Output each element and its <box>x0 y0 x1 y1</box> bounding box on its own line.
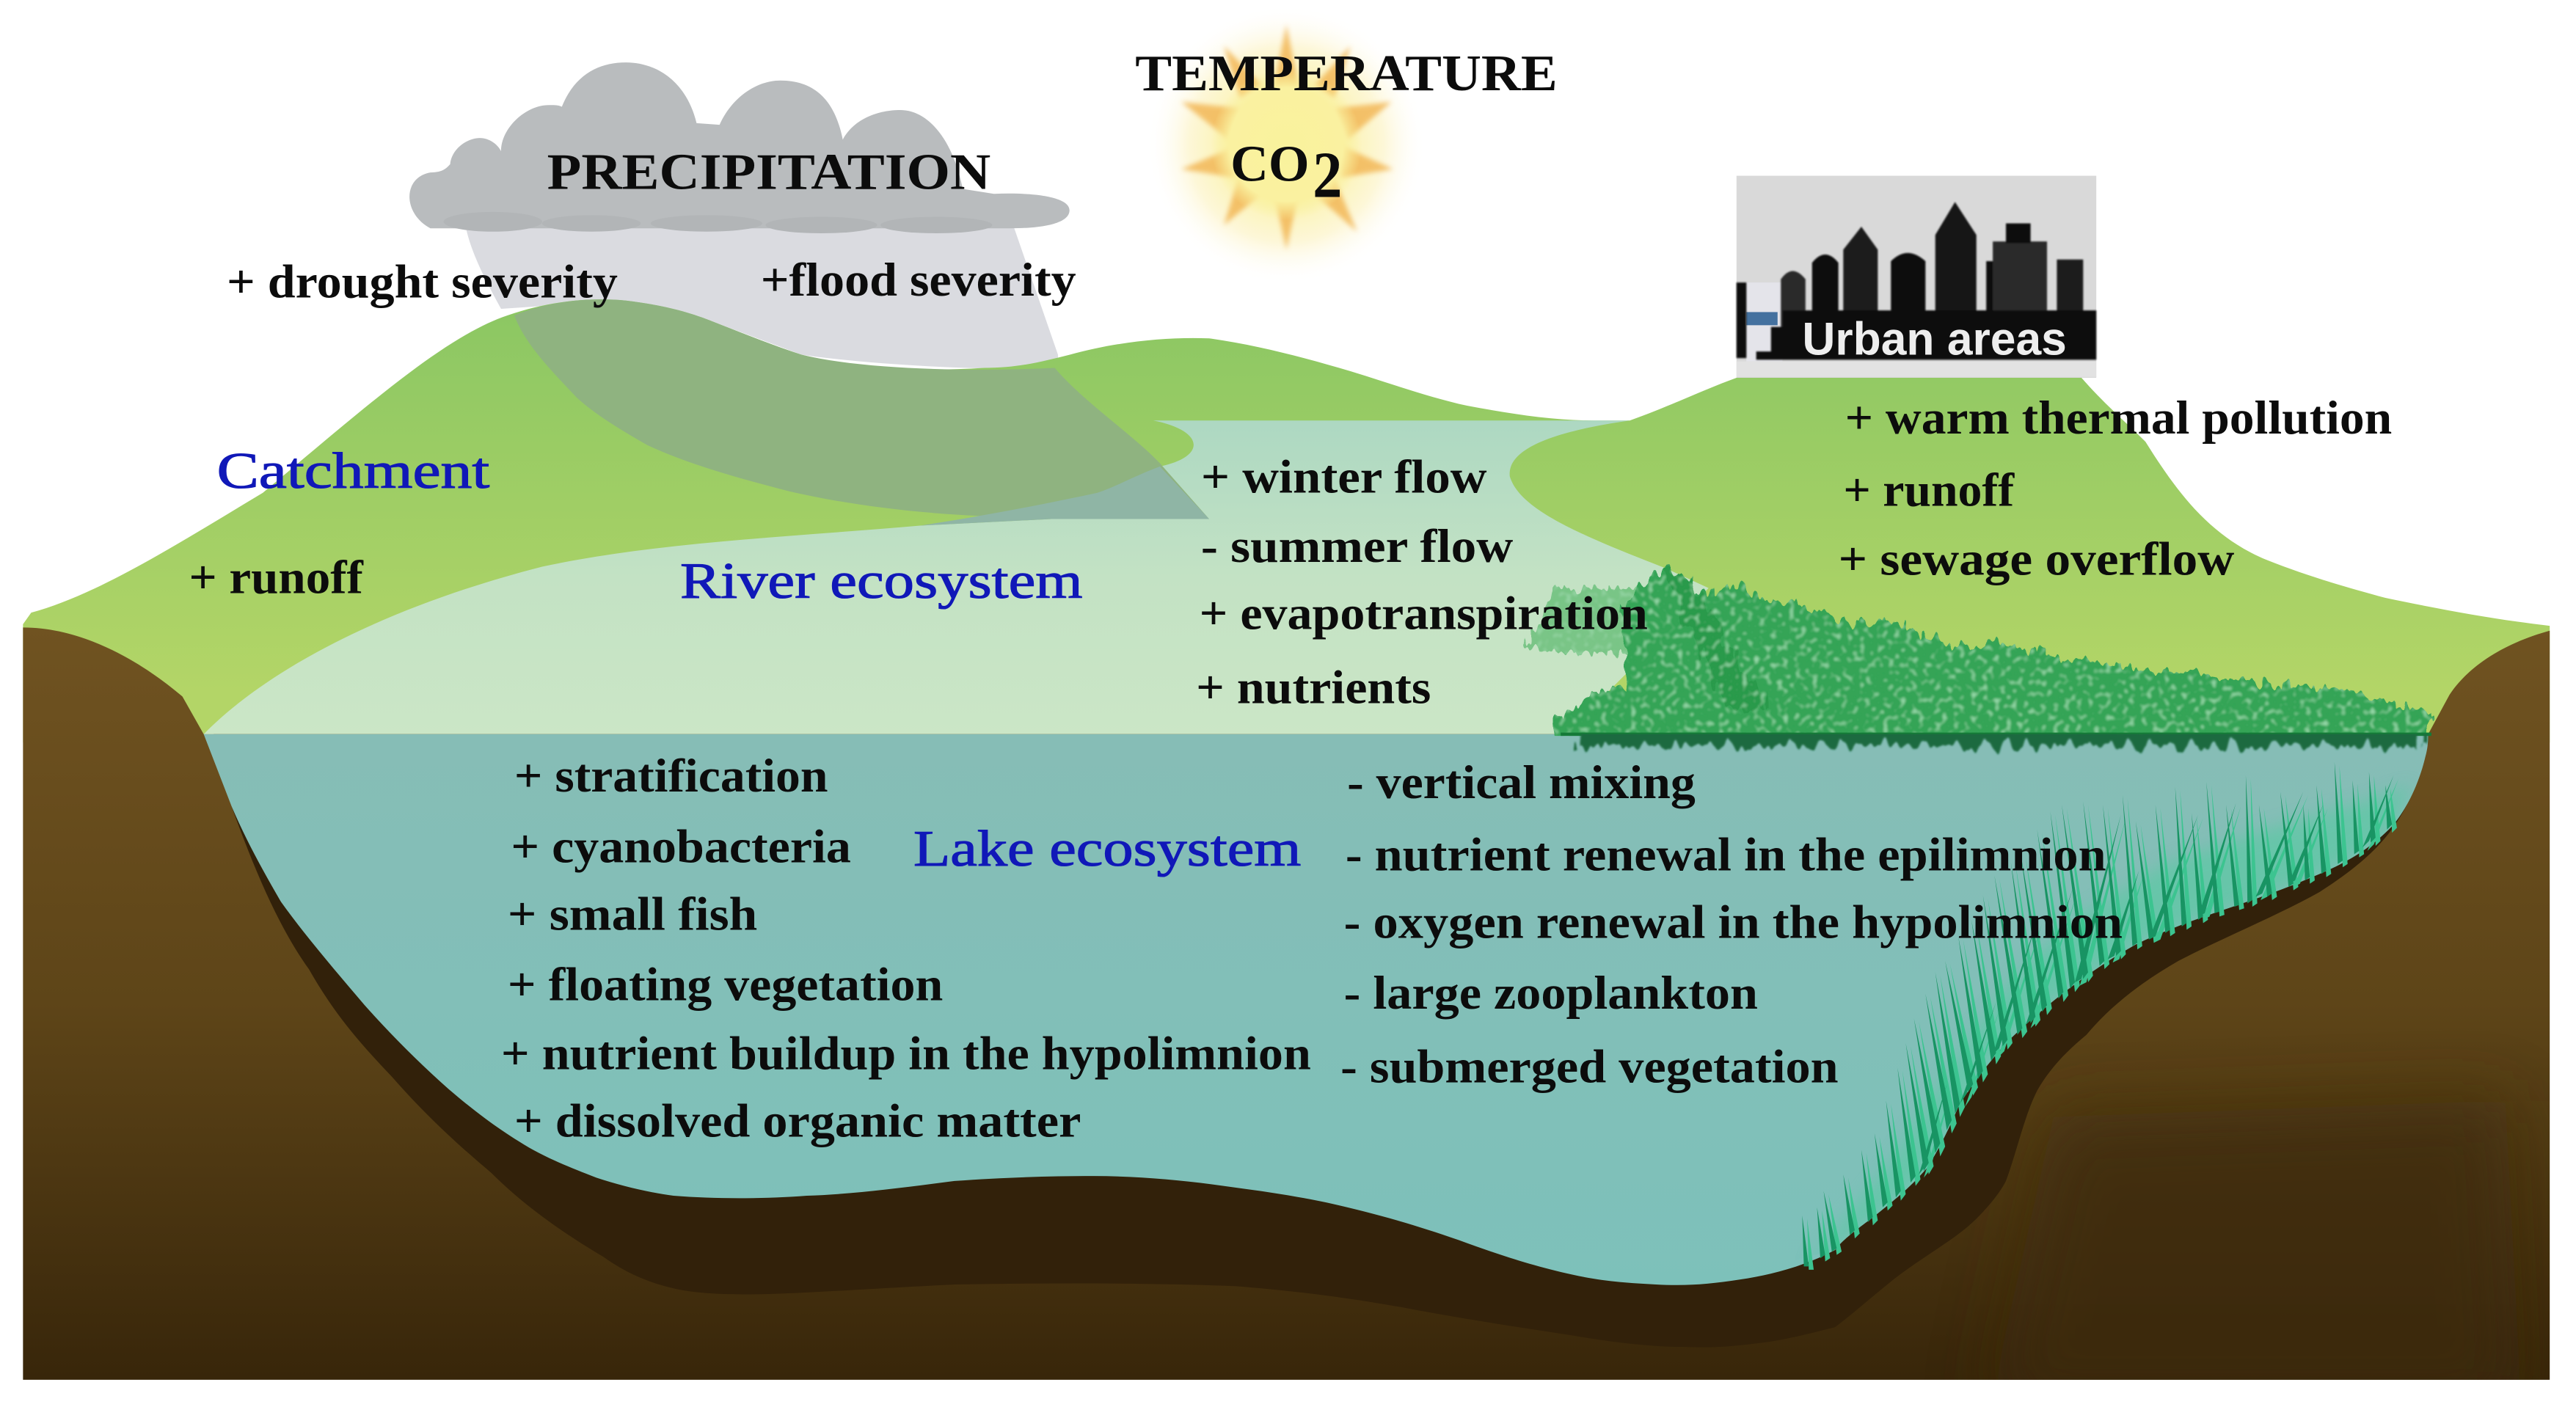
urban areas label: Urban areas <box>1802 314 2067 365</box>
grass base tint <box>1807 785 2412 1265</box>
text block: river effects: + evapotranspiration <box>1200 588 1648 640</box>
rain over river <box>920 467 1209 526</box>
sun core <box>1211 69 1362 220</box>
text block: lake increases: + cyanobacteria <box>511 821 851 874</box>
label: river ecosystem: River ecosystem <box>680 553 1083 610</box>
text block: urban effects: + sewage overflow <box>1839 533 2234 586</box>
text block: urban effects: + runoff <box>1843 464 2015 517</box>
dark lakebed <box>214 734 2428 1348</box>
sun <box>1147 5 1426 284</box>
heading: precipitation: PRECIPITATION <box>547 144 990 200</box>
label: catchment: Catchment <box>217 443 489 500</box>
text block: lake decreases <box>1340 756 2123 1094</box>
text block: lake decreases: - large zooplankton <box>1344 967 1758 1020</box>
text block: lake decreases: - vertical mixing <box>1347 756 1696 809</box>
text: catchment runoff: + runoff <box>189 551 364 604</box>
heading: CO2 <box>1230 136 1342 212</box>
heading: CO2: 2 <box>1313 139 1342 212</box>
sun glow <box>1147 5 1426 284</box>
catchment land <box>23 299 2550 742</box>
urban areas icon <box>1737 176 2096 378</box>
text: flood severity: +flood severity <box>761 254 1076 307</box>
text block: lake decreases: - nutrient renewal in the epilimnion <box>1346 829 2106 882</box>
submerged grass <box>1802 762 2412 1270</box>
soil <box>23 627 2550 1380</box>
text block: river effects: + nutrients <box>1196 661 1431 714</box>
shoreline trees <box>1528 570 2431 742</box>
river ecosystem water <box>204 420 1709 739</box>
lake water <box>204 734 2428 1285</box>
text block: urban effects: + warm thermal pollution <box>1845 392 2392 445</box>
soil shadow lower right <box>1988 1100 2522 1407</box>
label: lake ecosystem: Lake ecosystem <box>913 821 1301 877</box>
heading: CO2: CO <box>1230 136 1310 192</box>
text block: lake increases: + floating vegetation <box>508 959 943 1012</box>
rain column above the ridge <box>465 222 1058 369</box>
text block: urban effects <box>1839 392 2392 586</box>
sun rays <box>1181 25 1393 249</box>
rain over hill <box>514 299 1209 519</box>
text block: lake decreases: - submerged vegetation <box>1340 1041 1839 1094</box>
cloud <box>409 62 1070 233</box>
text: drought severity: + drought severity <box>227 255 618 308</box>
tree reflection on water <box>1580 726 2422 746</box>
text block: river effects <box>1196 451 1648 714</box>
text block: lake increases: + nutrient buildup in the hypolimnion <box>501 1028 1311 1081</box>
text block: river effects: - summer flow <box>1201 520 1513 573</box>
text block: lake decreases: - oxygen renewal in the hypolimnion <box>1344 896 2123 949</box>
heading: temperature: TEMPERATURE <box>1135 45 1558 102</box>
text block: lake increases: + small fish <box>508 888 757 940</box>
grass blades dark <box>1802 762 2393 1266</box>
text block: lake increases: + stratification <box>514 750 828 803</box>
grass blades light <box>1807 765 2398 1270</box>
text block: river effects: + winter flow <box>1201 451 1487 504</box>
text block: lake increases: + dissolved organic matter <box>514 1094 1081 1147</box>
text block: lake increases <box>501 750 1311 1147</box>
